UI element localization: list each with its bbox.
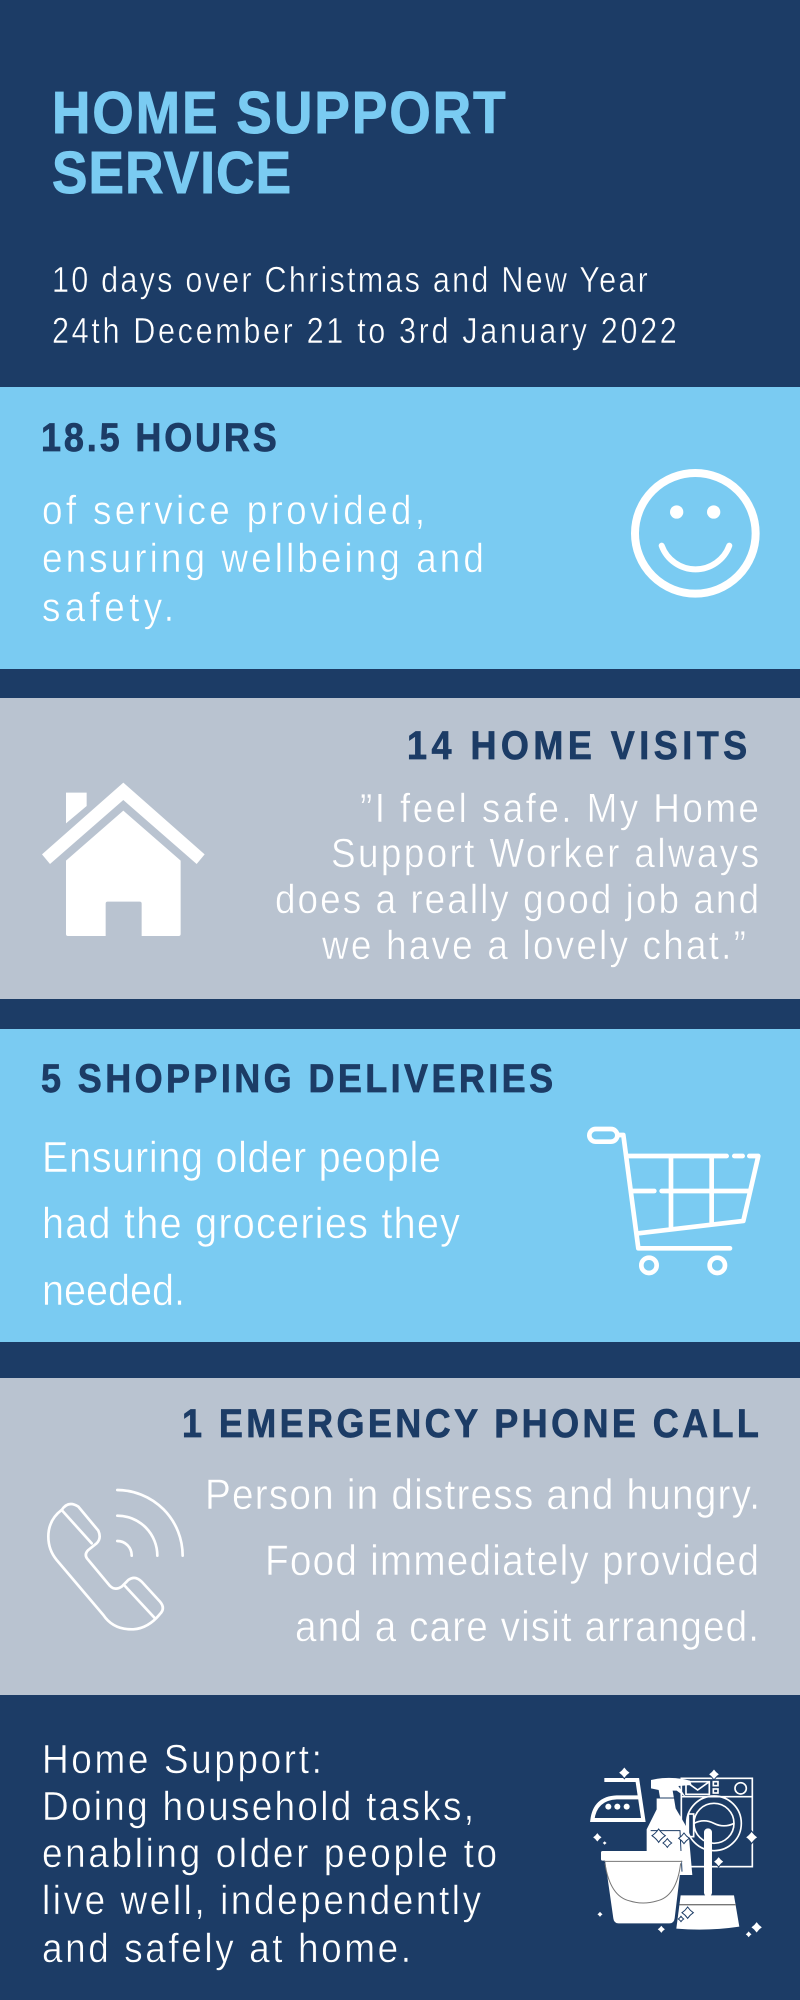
text: service provided: of service provided, xyxy=(42,488,425,533)
text: quote: ”I feel safe. My Home xyxy=(360,786,759,831)
text: quote: we have a lovely chat.” xyxy=(321,923,746,968)
title: SERVICE xyxy=(52,139,291,206)
subtitle: dates: 10 days over Christmas and New Year xyxy=(52,261,648,301)
panel: 18.5 hours xyxy=(0,387,800,669)
text: service provided: ensuring wellbeing and xyxy=(42,536,484,581)
text: groceries xyxy=(42,1132,460,1314)
text: home support summary: enabling older people to xyxy=(42,1831,497,1876)
text: home support summary: Doing household tasks, xyxy=(42,1784,474,1829)
title: HOME SUPPORT xyxy=(52,79,506,146)
panel: header xyxy=(0,0,800,387)
title xyxy=(52,79,506,206)
text: person in distress: Person in distress and hungry. xyxy=(205,1470,760,1518)
heading: 18.5 hours: 18.5 HOURS xyxy=(41,416,277,460)
icon: sparkles xyxy=(592,1767,763,1938)
text: home support summary: live well, independently xyxy=(42,1878,481,1923)
text: person in distress: Food immediately provided xyxy=(265,1536,759,1584)
panel: 1 emergency phone call xyxy=(0,1378,800,1695)
text: home support summary: and safely at home. xyxy=(42,1926,411,1971)
icon: broom xyxy=(676,1828,739,1930)
icon: household cleaning items xyxy=(592,1767,763,1938)
icon: smiley face xyxy=(635,473,756,594)
icon: telephone xyxy=(48,1490,183,1629)
text: quote xyxy=(275,786,759,968)
text: groceries: Ensuring older people xyxy=(42,1132,441,1181)
text: person in distress xyxy=(205,1470,760,1650)
text: service provided xyxy=(42,488,484,630)
subtitle: dates: 24th December 21 to 3rd January 2022 xyxy=(52,312,677,352)
text: home support summary: Home Support: xyxy=(42,1737,322,1782)
text: groceries: had the groceries they xyxy=(42,1198,460,1247)
icon: bucket xyxy=(601,1851,685,1923)
heading: 5 shopping deliveries: 5 SHOPPING DELIVERIES xyxy=(41,1057,553,1101)
text: groceries: needed. xyxy=(42,1265,185,1314)
text: person in distress: and a care visit arranged. xyxy=(295,1602,759,1650)
text: quote: does a really good job and xyxy=(275,877,759,922)
panel: footer xyxy=(0,1695,800,2000)
heading: 14 home visits: 14 HOME VISITS xyxy=(407,724,747,768)
icon: house xyxy=(42,783,205,936)
text: service provided: safety. xyxy=(42,585,174,630)
subtitle: dates xyxy=(52,261,677,352)
panel: 14 home visits xyxy=(0,698,800,999)
text: quote: Support Worker always xyxy=(331,831,759,876)
icon: shopping cart xyxy=(589,1129,758,1273)
text: home support summary xyxy=(42,1737,497,1971)
panel: 5 shopping deliveries xyxy=(0,1029,800,1342)
icon: iron xyxy=(592,1780,643,1820)
icon: washing machine xyxy=(681,1778,752,1867)
icon: spray bottle xyxy=(647,1778,692,1875)
heading: 1 emergency phone call: 1 EMERGENCY PHONE CALL xyxy=(182,1402,759,1446)
